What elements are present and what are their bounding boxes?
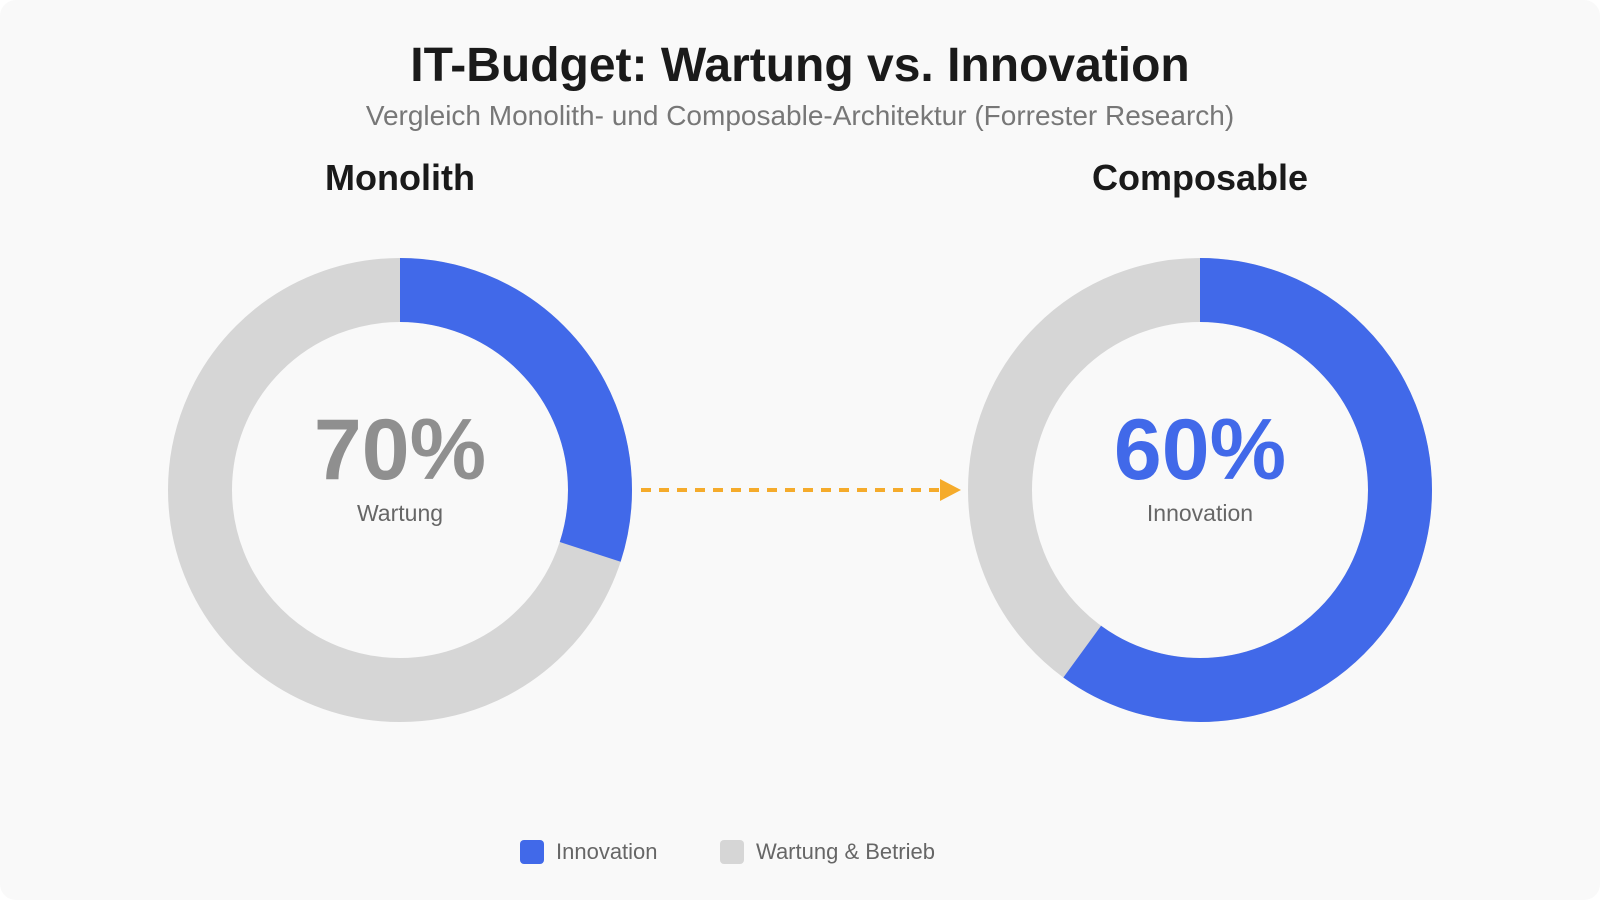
donut: Composable <box>1000 290 1400 690</box>
value: 60% Innovation: Innovation <box>1147 500 1253 526</box>
value: 70% Wartung: 70% <box>314 402 486 498</box>
legend item: Wartung & Betrieb <box>720 839 935 864</box>
arrow <box>641 479 961 501</box>
title: IT-Budget: Wartung vs. Innovation <box>410 39 1190 92</box>
legend <box>520 839 935 864</box>
donut: Monolith <box>200 290 600 690</box>
legend: Wartung & Betrieb <box>756 839 935 864</box>
legend item: Innovation <box>520 839 658 864</box>
legend: Innovation <box>556 839 658 864</box>
subtitle: Vergleich Monolith- und Composable-Architektur (Forrester Research) <box>366 100 1234 131</box>
value: 60% Innovation: 60% <box>1114 402 1286 498</box>
value: 70% Wartung: Wartung <box>357 500 443 526</box>
heading: Composable: Composable <box>1092 157 1308 198</box>
heading: Monolith: Monolith <box>325 157 475 198</box>
